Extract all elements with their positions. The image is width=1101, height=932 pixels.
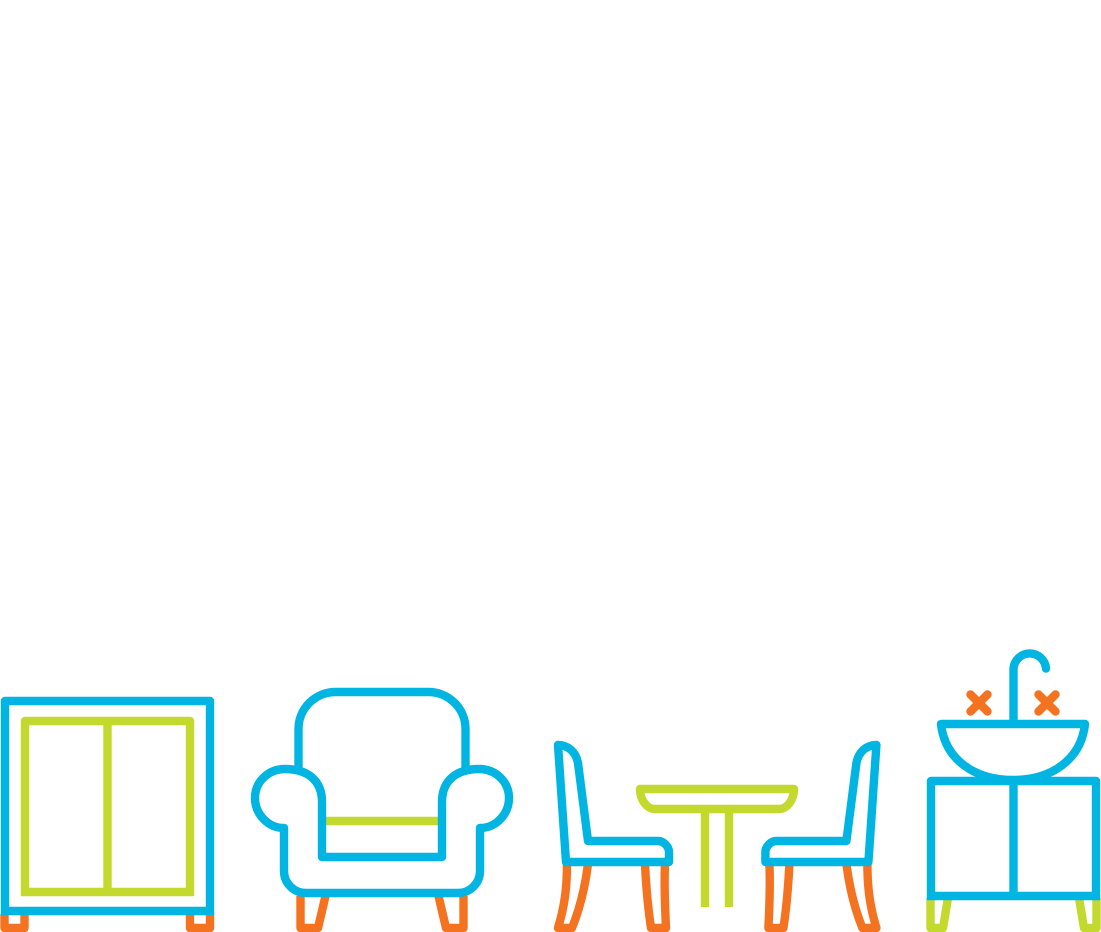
armchair legs	[300, 896, 464, 928]
icon: armchair	[255, 692, 509, 928]
left chair body	[558, 745, 669, 862]
cabinet legs	[4, 914, 210, 928]
cabinet frame	[1, 701, 214, 915]
faucet	[1014, 653, 1046, 723]
right chair body	[765, 745, 876, 862]
basin	[941, 724, 1085, 780]
tap handles	[970, 694, 1056, 712]
cabinet door panels	[21, 721, 194, 896]
armchair arms and base	[255, 769, 509, 893]
icon: washbasin vanity	[927, 653, 1100, 928]
right chair	[765, 745, 876, 928]
vanity legs	[930, 898, 1096, 928]
table top and legs	[640, 789, 794, 907]
armchair seat line	[326, 817, 438, 825]
vanity cabinet	[927, 781, 1100, 900]
armchair back	[298, 692, 466, 768]
right chair legs	[768, 864, 876, 928]
icon: cabinet	[1, 701, 214, 928]
left chair	[558, 745, 669, 928]
icon: dining table with chairs	[558, 745, 876, 928]
left chair legs	[558, 864, 666, 928]
